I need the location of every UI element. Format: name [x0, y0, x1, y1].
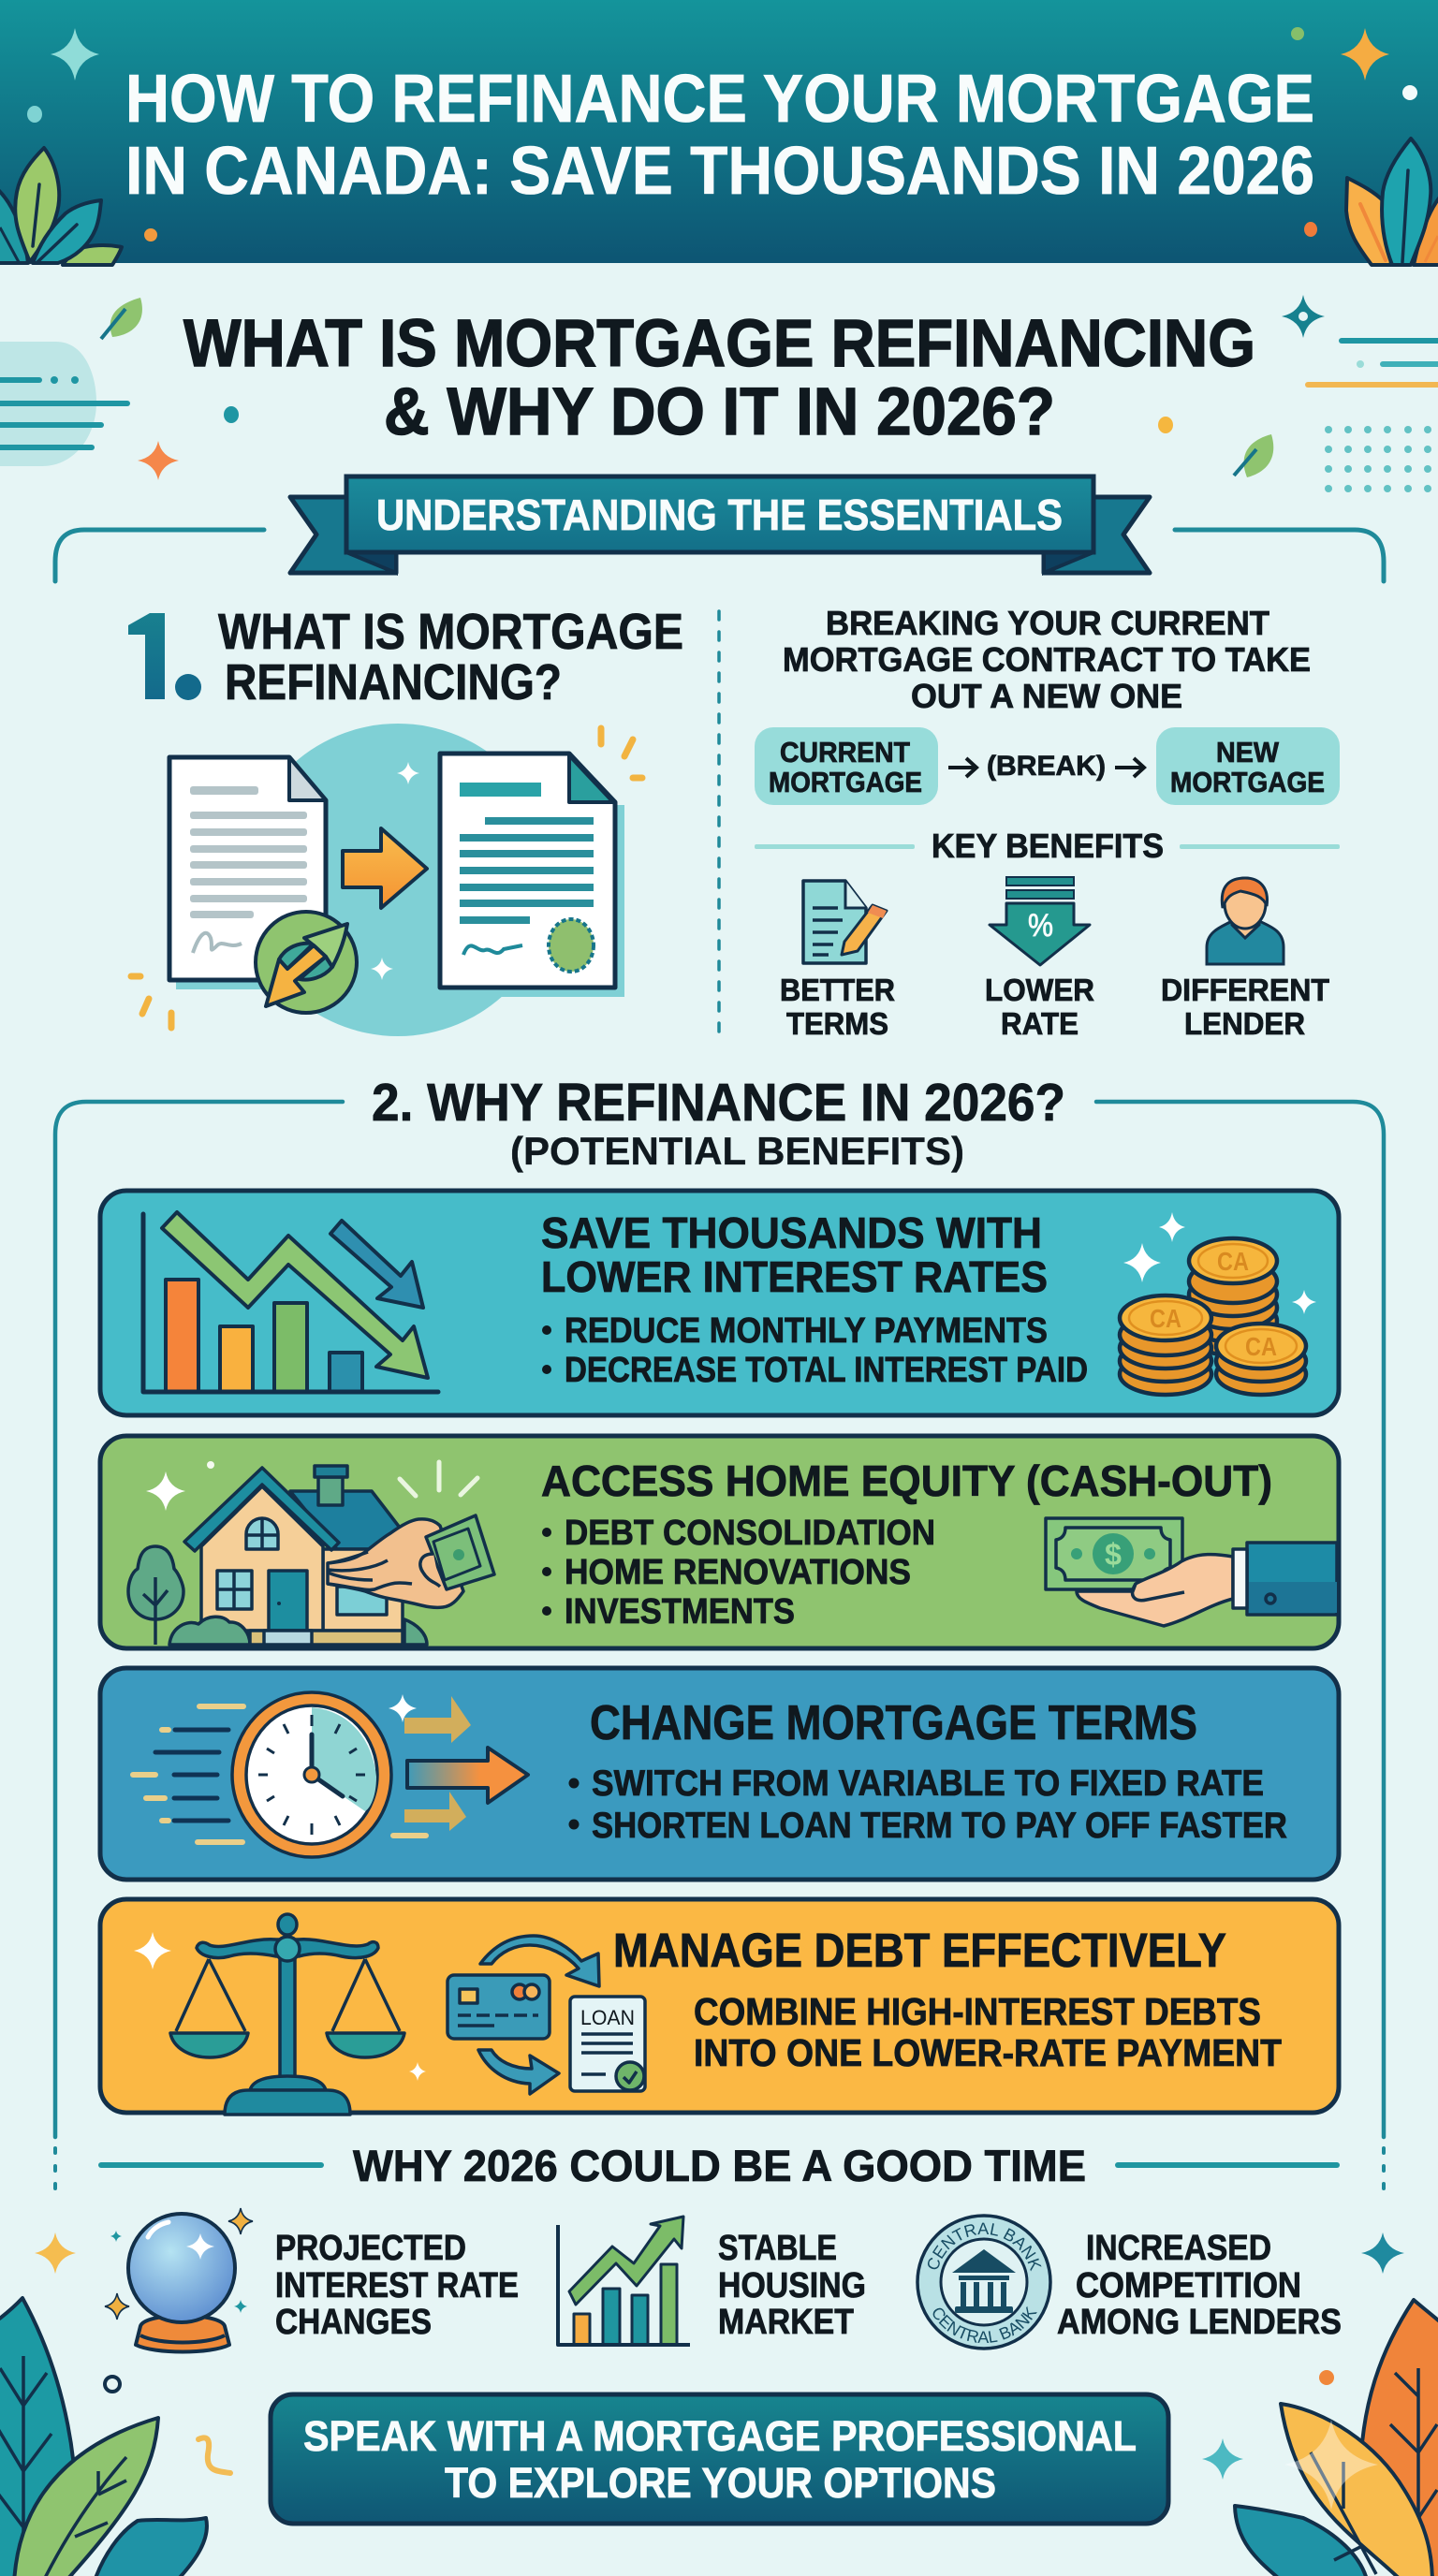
- flow: current mortgage to new mortgage: [755, 727, 1340, 805]
- text: manage debt effectively: COMBINE HIGH-INTEREST DEBTS: [694, 1990, 1261, 2033]
- text: stable housing market: MARKET: [718, 2303, 854, 2342]
- text: stable housing market: STABLE: [718, 2229, 837, 2268]
- text: save thousands: [541, 1208, 1088, 1390]
- text: access home equity: HOME RENOVATIONS: [565, 1553, 911, 1592]
- panel: projected interest rate changes: [105, 2208, 519, 2351]
- icon: central bank seal: [916, 2214, 1052, 2350]
- text: change mortgage terms: [569, 1696, 1287, 1846]
- ribbon banner: understanding the essentials: [290, 476, 1150, 573]
- text: projected interest rate changes: [275, 2229, 519, 2342]
- flow: current mortgage to new mortgage: CURRENT: [780, 736, 910, 768]
- panel: save thousands with lower interest rates: [100, 1191, 1339, 1415]
- text: save thousands: LOWER INTEREST RATES: [541, 1252, 1048, 1301]
- text: access home equity: DEBT CONSOLIDATION: [565, 1514, 935, 1553]
- text: definition: BREAKING YOUR CURRENT: [826, 604, 1269, 642]
- icon: header leaves right: [1346, 139, 1438, 265]
- call to action button: [271, 2394, 1168, 2524]
- heading: what is mortgage refinancing: & WHY DO IT IN 2026?: [384, 375, 1055, 449]
- text: access home equity: INVESTMENTS: [565, 1592, 795, 1632]
- illustration: old document to new document: [131, 724, 642, 1036]
- icon: footer leaves left: [0, 2298, 207, 2576]
- heading: number 1: [128, 613, 201, 700]
- icon: crystal ball: [128, 2214, 235, 2351]
- text: change mortgage terms: SHORTEN LOAN TERM TO PAY OFF FASTER: [592, 1806, 1287, 1846]
- text: increased competition among lenders: COMPETITION: [1076, 2266, 1301, 2305]
- icon: different lender person: [1207, 878, 1284, 964]
- icon: house releasing cash: [128, 1466, 494, 1645]
- icon: orange arrow: [343, 828, 427, 908]
- icon: current mortgage document: [169, 757, 326, 980]
- icon: lower rate arrow: [990, 877, 1090, 965]
- chart: falling rates bar chart: [143, 1212, 438, 1392]
- icon: stacks of CA coins: [1120, 1238, 1306, 1395]
- heading: what is mortgage refinancing: [183, 307, 1255, 449]
- text: projected interest rate changes: INTEREST RATE: [275, 2266, 519, 2305]
- icon: better terms: [803, 881, 887, 963]
- text: manage debt effectively: INTO ONE LOWER-RATE PAYMENT: [694, 2031, 1282, 2074]
- flow: current mortgage to new mortgage: MORTGAGE: [769, 766, 922, 798]
- heading: key benefits: KEY BENEFITS: [932, 827, 1164, 865]
- text: benefit labels: TERMS: [786, 1006, 888, 1041]
- icon: green refresh arrows: [256, 912, 357, 1013]
- text: projected interest rate changes: PROJECTED: [275, 2229, 466, 2268]
- heading: key benefits: [755, 827, 1340, 865]
- panel: access home equity: [100, 1436, 1339, 1648]
- title: [125, 62, 1314, 209]
- heading: why 2026 could be a good time: WHY 2026 COULD BE A GOOD TIME: [353, 2141, 1086, 2190]
- text: manage debt effectively: [613, 1924, 1282, 2074]
- ribbon banner: understanding the essentials: UNDERSTANDING THE ESSENTIALS: [376, 490, 1063, 539]
- flow: current mortgage to new mortgage: NEW: [1216, 736, 1280, 768]
- vertical dashed divider: [717, 611, 721, 1037]
- heading: what is mortgage refinancing: WHAT IS MORTGAGE REFINANCING: [183, 307, 1255, 381]
- text: definition: [783, 604, 1311, 715]
- icon: stacks of CA coins: CA: [1150, 1304, 1181, 1333]
- text: benefit labels: LENDER: [1184, 1006, 1305, 1041]
- decorative stars and dots near footer: [35, 2232, 1404, 2480]
- panel: header banner: [0, 0, 1438, 265]
- text: access home equity: [541, 1456, 1272, 1632]
- frame lines around section 2: [55, 1102, 1384, 2197]
- text: increased competition among lenders: AMONG LENDERS: [1057, 2303, 1342, 2342]
- icon: balance scale: [170, 1914, 404, 2115]
- text: stable housing market: HOUSING: [718, 2266, 866, 2305]
- text: save thousands: SAVE THOUSANDS WITH: [541, 1208, 1042, 1257]
- heading: section 1: WHAT IS MORTGAGE: [218, 604, 683, 660]
- text: benefit labels: LOWER: [985, 973, 1094, 1007]
- chart: rising bars and arrow: [558, 2217, 690, 2345]
- call to action button: SPEAK WITH A MORTGAGE PROFESSIONAL: [303, 2412, 1137, 2460]
- text: save thousands: REDUCE MONTHLY PAYMENTS: [565, 1311, 1048, 1351]
- text: benefit labels: [780, 973, 1329, 1041]
- panel: section 1 right - definition and key benefits: [755, 604, 1340, 1041]
- icon: footer leaves right: [1235, 2300, 1438, 2576]
- text: increased competition among lenders: [1057, 2229, 1342, 2342]
- icon: credit card to loan: LOAN: [580, 2006, 635, 2029]
- icon: credit card to loan: [448, 1936, 645, 2094]
- text: stable housing market: [718, 2229, 866, 2342]
- text: increased competition among lenders: INCREASED: [1086, 2229, 1271, 2268]
- text: change mortgage terms: CHANGE MORTGAGE TERMS: [590, 1696, 1197, 1750]
- heading: why 2026 could be a good time: [98, 2141, 1340, 2190]
- flow: current mortgage to new mortgage: MORTGAGE: [1170, 766, 1325, 798]
- text: definition: OUT A NEW ONE: [911, 677, 1182, 715]
- text: save thousands: DECREASE TOTAL INTEREST PAID: [565, 1351, 1088, 1390]
- icon: hand holding cash: [1046, 1518, 1337, 1626]
- icon: central bank seal: CENTRAL BANK: [928, 2222, 1041, 2271]
- panel: section 1 left - what is mortgage refinancing: [128, 604, 683, 1036]
- call to action button: TO EXPLORE YOUR OPTIONS: [445, 2459, 996, 2507]
- text: definition: MORTGAGE CONTRACT TO TAKE: [783, 640, 1311, 679]
- text: benefit labels: RATE: [1001, 1006, 1078, 1041]
- title: HOW TO REFINANCE YOUR MORTGAGE: [125, 62, 1314, 137]
- text: access home equity: ACCESS HOME EQUITY (CASH-OUT): [541, 1456, 1272, 1505]
- panel: stable housing market: [558, 2217, 866, 2345]
- text: manage debt effectively: MANAGE DEBT EFFECTIVELY: [613, 1924, 1226, 1977]
- heading: why refinance in 2026: (POTENTIAL BENEFITS): [510, 1129, 964, 1173]
- icon: hand holding cash: $: [1105, 1537, 1122, 1572]
- panel: change mortgage terms: [100, 1668, 1339, 1880]
- icon: central bank seal: CENTRAL BANK: [932, 2306, 1037, 2343]
- icon: header leaves left: [0, 148, 122, 265]
- text: benefit labels: DIFFERENT: [1161, 973, 1329, 1007]
- icon: lower rate arrow: %: [1028, 908, 1053, 944]
- text: benefit labels: BETTER: [780, 973, 895, 1007]
- heading: section 1: REFINANCING?: [225, 654, 562, 710]
- text: projected interest rate changes: CHANGES: [275, 2303, 432, 2342]
- decorative background shapes under header: [0, 295, 1438, 492]
- icon: stacks of CA coins: CA: [1245, 1332, 1277, 1361]
- text: change mortgage terms: SWITCH FROM VARIABLE TO FIXED RATE: [592, 1764, 1264, 1804]
- icon: new mortgage document: [440, 754, 615, 988]
- flow: current mortgage to new mortgage: (BREAK): [987, 751, 1106, 782]
- panel: increased competition among lenders: [916, 2214, 1342, 2350]
- heading: why refinance in 2026: 2. WHY REFINANCE IN 2026?: [372, 1073, 1065, 1133]
- heading: section 1: [218, 604, 683, 710]
- icon: clock with speed lines: [133, 1692, 528, 1857]
- icon: stacks of CA coins: CA: [1217, 1247, 1249, 1276]
- panel: manage debt effectively: [100, 1899, 1339, 2115]
- title: IN CANADA: SAVE THOUSANDS IN 2026: [125, 134, 1314, 209]
- heading: why refinance in 2026: [372, 1073, 1065, 1173]
